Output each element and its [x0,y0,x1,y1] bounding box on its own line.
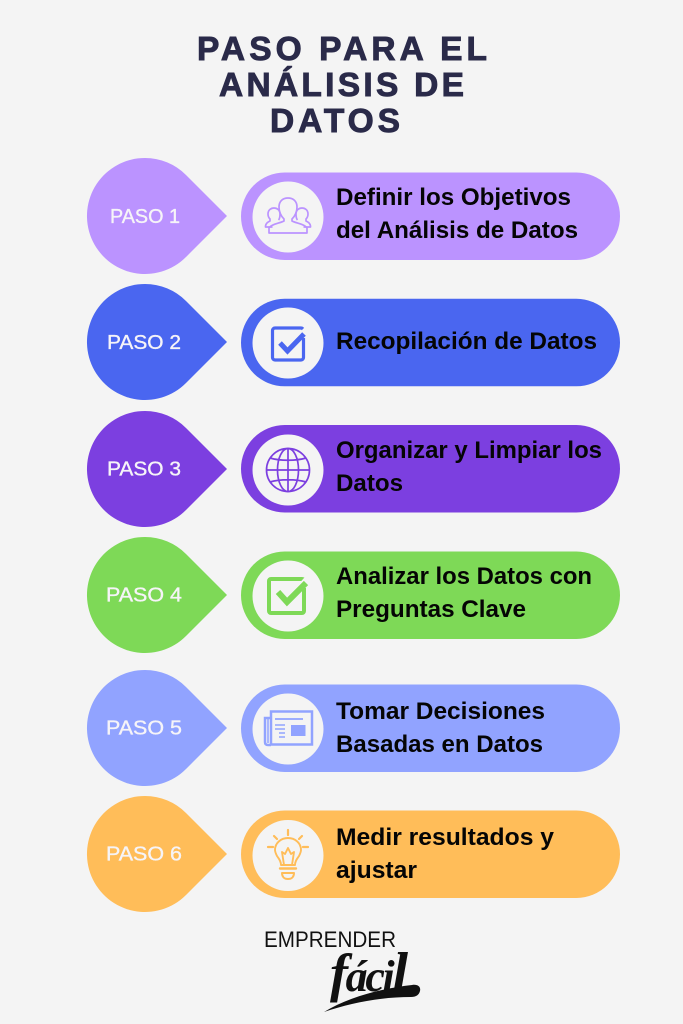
step 6 [87,796,620,912]
label: paso 6: PASO 6 [106,844,182,866]
label: paso 5: PASO 5 [106,718,182,740]
badge: paso 2 [87,284,227,400]
label: paso 2: PASO 2 [107,332,181,354]
title: PASO PARA EL [197,31,487,68]
icon: group of people [252,182,324,252]
text: paso 4 [336,563,592,623]
logo: emprender fácil: fácil [330,942,408,1004]
text: paso 6 [336,824,555,884]
pill: paso 3 [241,425,620,512]
text: paso 6: Medir resultados y [336,824,555,851]
text: paso 1: Definir los Objetivos [336,184,571,211]
badge: paso 5 [87,670,227,786]
step 4 [87,537,620,653]
step 3 [87,411,620,527]
pill: paso 2 [241,299,620,386]
text: paso 5 [336,698,545,758]
label: paso 3: PASO 3 [107,458,181,480]
text: paso 3: Datos [336,470,403,497]
text: paso 1 [336,184,578,244]
pill: paso 6 [241,810,620,898]
badge: paso 6 [87,796,227,912]
badge: paso 1 [87,158,227,274]
icon: light bulb [252,820,324,891]
step 5 [87,670,620,786]
text: paso 5: Tomar Decisiones [336,698,545,725]
step 1 [87,158,620,274]
label: paso 4: PASO 4 [106,584,182,606]
text: paso 6: ajustar [336,857,417,884]
step 2 [87,284,620,400]
logo: emprender fácil [264,927,420,1012]
title: DATOS [270,103,400,140]
pill: paso 5 [241,684,620,772]
title [197,31,487,140]
pill: paso 1 [241,172,620,260]
title: ANÁLISIS DE [219,66,464,104]
logo: emprender fácil: EMPRENDER [264,927,396,952]
icon: globe [252,434,324,506]
pill: paso 4 [241,552,620,639]
badge: paso 4 [87,537,227,653]
text: paso 3 [336,437,602,497]
logo swoosh [324,985,420,1012]
icon: green checkbox [252,560,324,632]
text: paso 3: Organizar y Limpiar los [336,437,602,464]
text: paso 1: del Análisis de Datos [336,217,578,244]
icon: newspaper [252,694,324,764]
text: paso 4: Preguntas Clave [336,596,526,623]
text: paso 5: Basadas en Datos [336,731,543,758]
text: paso 2: Recopilación de Datos [336,328,597,355]
badge: paso 3 [87,411,227,527]
label: paso 1: PASO 1 [110,206,180,228]
text: paso 4: Analizar los Datos con [336,563,592,590]
icon: checkbox [252,308,324,378]
